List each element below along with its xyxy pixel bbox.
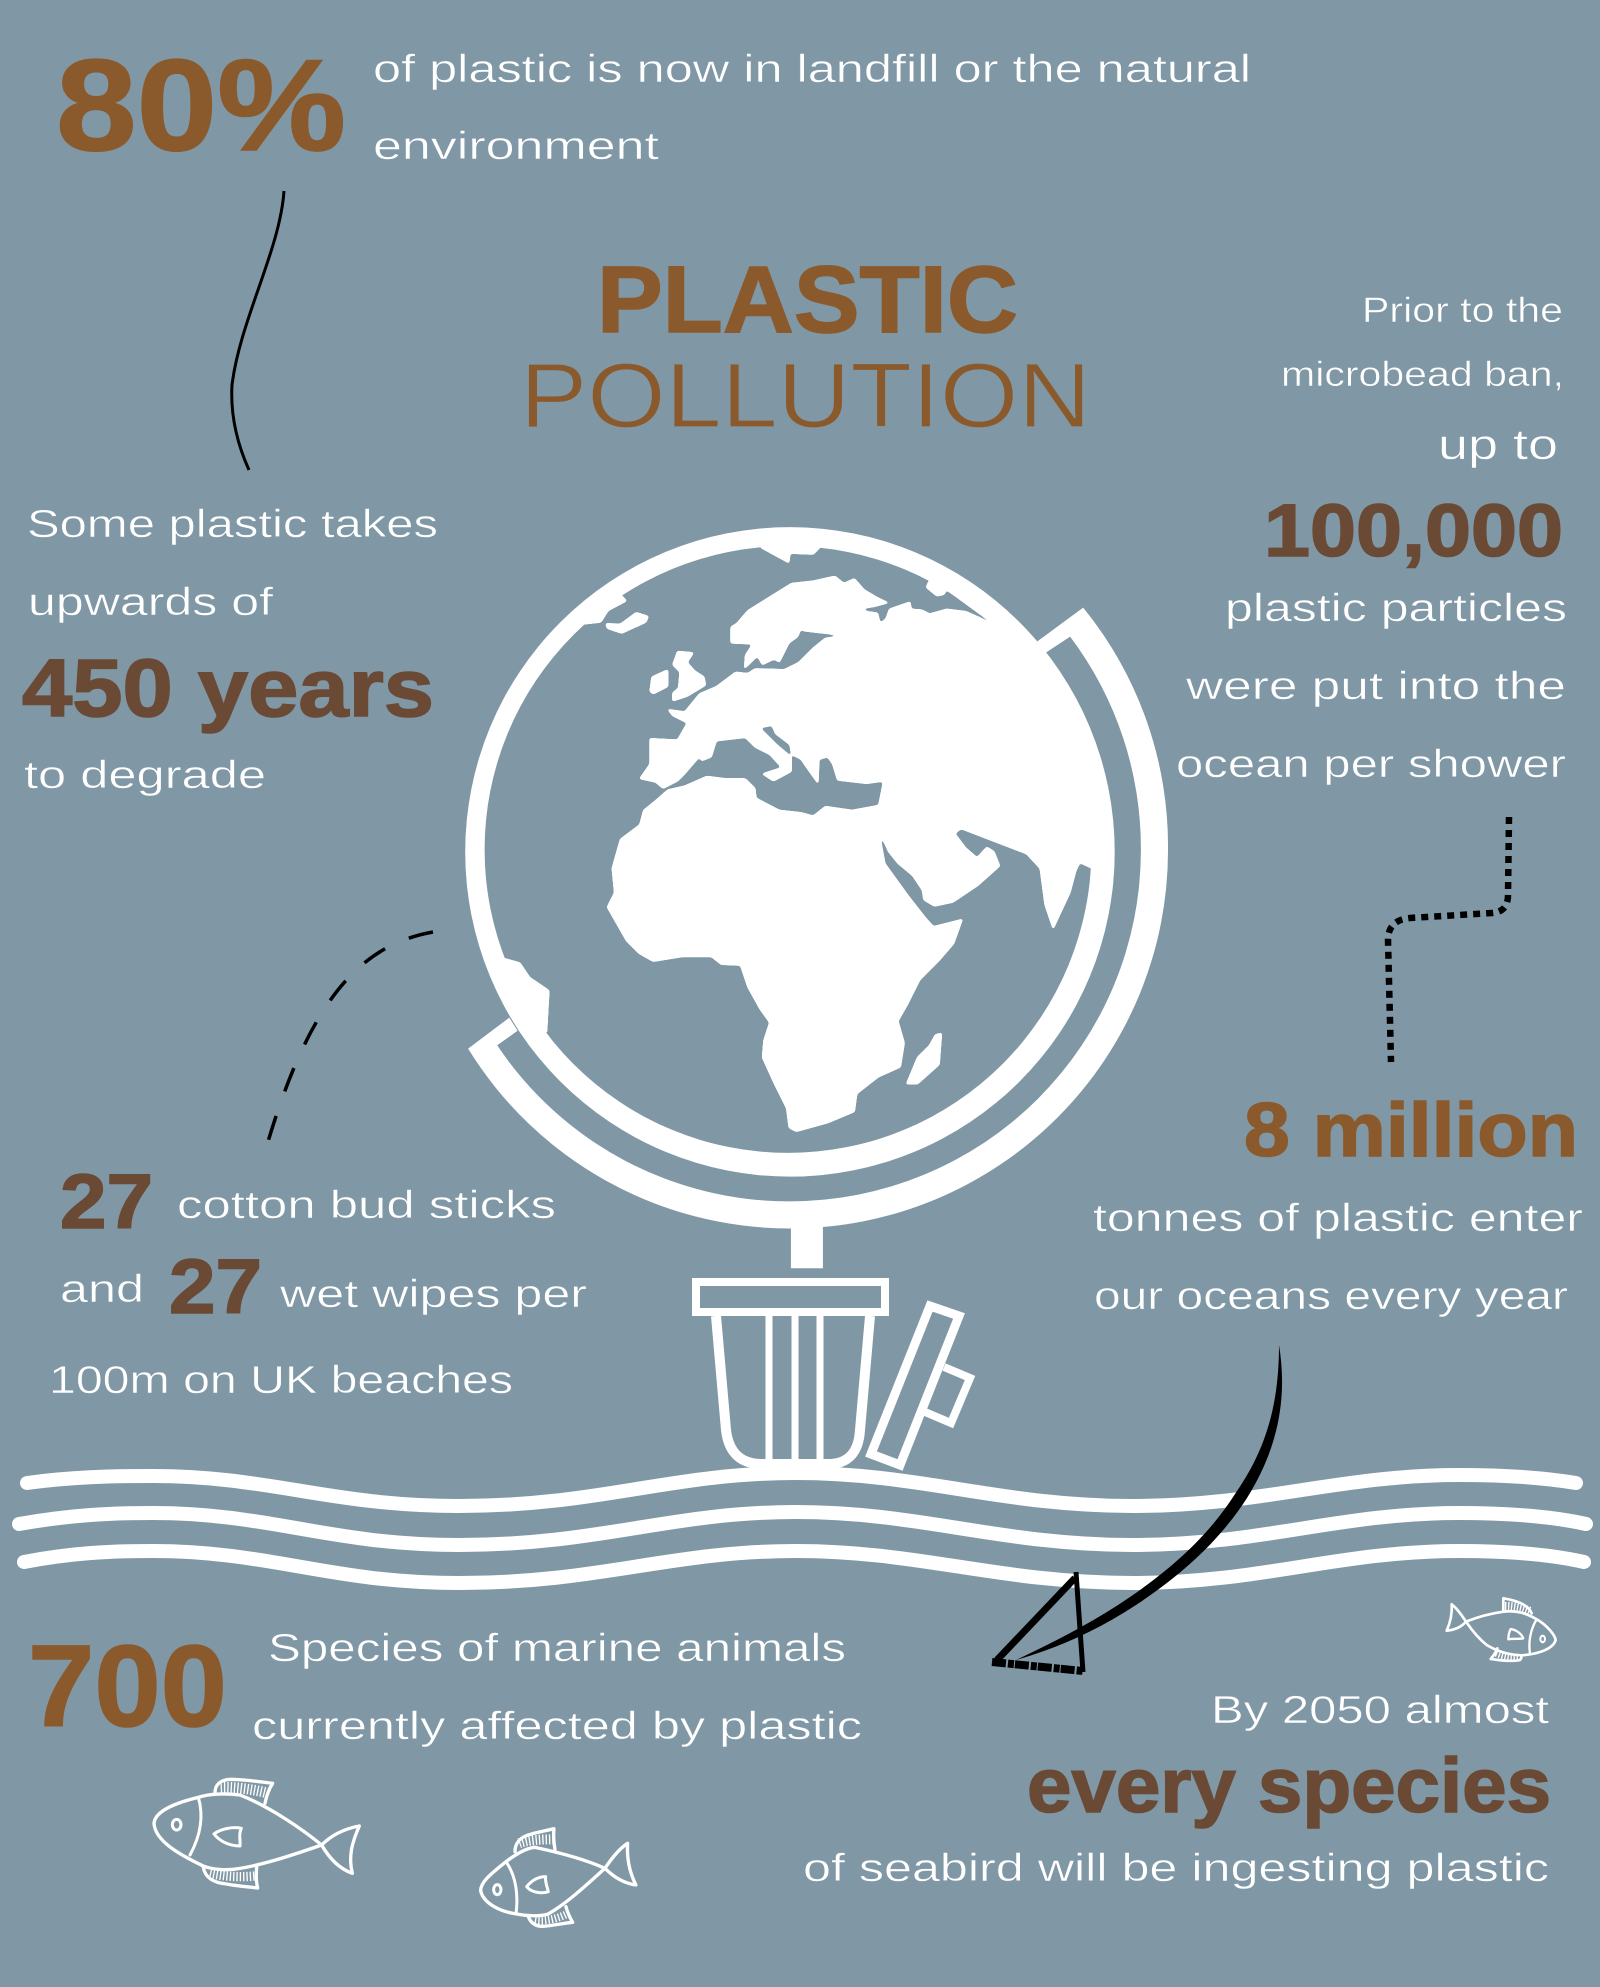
curved black arrow bbox=[992, 1345, 1282, 1672]
stat: 450 years to degrade: Some plastic takes bbox=[27, 503, 438, 546]
stat: 8 million tonnes bbox=[1093, 1088, 1583, 1318]
dotted connector line bbox=[1388, 817, 1509, 1062]
stat: 450 years to degrade: 450 years bbox=[22, 643, 434, 734]
icon: rubbish bin bbox=[696, 1282, 970, 1465]
stat: 100,000 plastic particles bbox=[1176, 291, 1567, 786]
stat: 80 percent in landfill: environment bbox=[373, 125, 659, 168]
icons: two fish bottom left bbox=[154, 1779, 636, 1926]
stat: every species of seabird: every species bbox=[1027, 1743, 1551, 1829]
stat: every species of seabird: By 2050 almost bbox=[1211, 1689, 1549, 1732]
stat: 700 species bbox=[28, 1621, 862, 1751]
line connector: curved line from 80 percent to 450 years bbox=[232, 191, 284, 470]
stat: 100,000 plastic particles: plastic particles bbox=[1225, 587, 1567, 630]
globe stand arc bbox=[468, 608, 1168, 1229]
stat: 450 years to degrade: upwards of bbox=[28, 581, 273, 624]
stat: 100,000 plastic particles: were put into the bbox=[1185, 665, 1566, 708]
stat: 27 cotton bud sticks and wet wipes: 100m on UK beaches bbox=[49, 1359, 513, 1402]
stat: 80 percent in landfill: of plastic is now in landfill or the natural bbox=[373, 48, 1251, 91]
stat: 8 million tonnes: our oceans every year bbox=[1094, 1275, 1568, 1318]
bin rim bbox=[696, 1282, 885, 1312]
title: PLASTIC bbox=[597, 247, 1018, 353]
stat: 80 percent in landfill: 80% bbox=[56, 32, 346, 178]
stat: 700 species: currently affected by plastic bbox=[252, 1705, 862, 1748]
waves bbox=[19, 1473, 1586, 1583]
globe stem bbox=[791, 1217, 823, 1268]
stat: 27 cotton bud sticks and wet wipes: 27 bbox=[60, 1159, 153, 1245]
stat: 27 cotton bud sticks and wet wipes: wet wipes per bbox=[279, 1273, 587, 1316]
stat: 80 percent in landfill bbox=[56, 32, 1251, 178]
stat: every species of seabird bbox=[803, 1689, 1551, 1890]
title: POLLUTION bbox=[520, 345, 1091, 447]
stat: every species of seabird: of seabird will be ingesting plastic bbox=[803, 1847, 1549, 1890]
globe ring bbox=[465, 527, 1115, 1177]
title bbox=[520, 247, 1091, 447]
stat: 450 years to degrade bbox=[22, 503, 438, 797]
stat: 700 species: 700 bbox=[28, 1621, 227, 1751]
stat: 27 cotton bud sticks and wet wipes: and bbox=[60, 1268, 144, 1311]
stat: 8 million tonnes: 8 million bbox=[1244, 1088, 1578, 1173]
stat: 100,000 plastic particles: microbead ban, bbox=[1281, 355, 1564, 394]
dashed connector line bbox=[267, 932, 433, 1145]
stat: 700 species: Species of marine animals bbox=[268, 1627, 846, 1670]
large fish bbox=[154, 1779, 359, 1888]
stat: 100,000 plastic particles: ocean per shower bbox=[1176, 743, 1566, 786]
stat: 27 cotton bud sticks and wet wipes bbox=[49, 1159, 587, 1402]
stat: 100,000 plastic particles: up to bbox=[1438, 421, 1558, 469]
stat: 450 years to degrade: to degrade bbox=[24, 754, 266, 797]
bin ribs bbox=[769, 1316, 820, 1464]
fallen bin lid bbox=[871, 1306, 959, 1465]
stat: 100,000 plastic particles: Prior to the bbox=[1362, 291, 1563, 330]
stat: 27 cotton bud sticks and wet wipes: cotton bud sticks bbox=[177, 1184, 556, 1227]
stat: 27 cotton bud sticks and wet wipes: 27 bbox=[169, 1244, 262, 1330]
lid handle bbox=[925, 1367, 970, 1423]
icon: small fish top right bbox=[1447, 1598, 1556, 1661]
continents bbox=[503, 541, 1106, 1132]
bin body bbox=[716, 1316, 870, 1464]
second fish bbox=[481, 1829, 636, 1926]
stat: 8 million tonnes: tonnes of plastic enter bbox=[1093, 1197, 1583, 1240]
stat: 100,000 plastic particles: 100,000 bbox=[1264, 489, 1563, 572]
globe illustration bbox=[465, 527, 1168, 1268]
